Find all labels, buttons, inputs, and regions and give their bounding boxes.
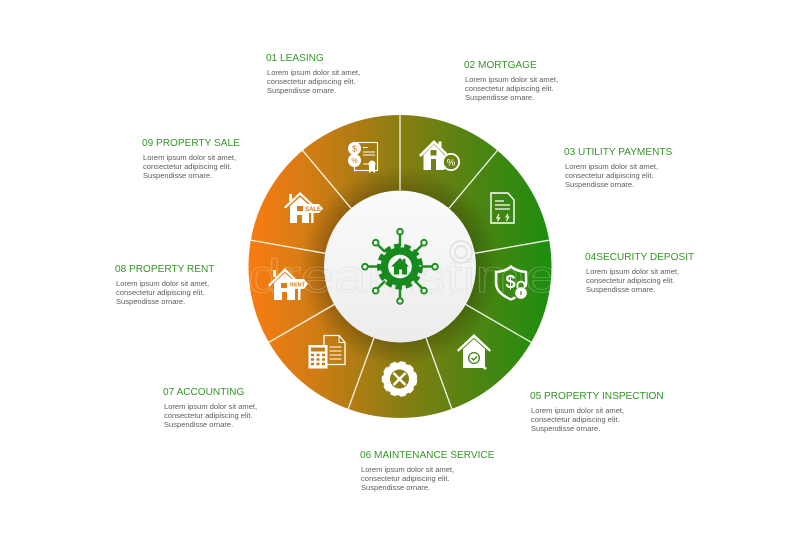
text block: 07 accounting: Suspendisse ornare. [164, 420, 233, 429]
icon: center gear with network nodes [362, 229, 438, 304]
icon: property sale house: SALE [305, 207, 321, 213]
text block: 01 leasing: Suspendisse ornare. [267, 86, 336, 95]
text block: 07 accounting: consectetur adipiscing elit. [164, 411, 253, 420]
text block: 05 property inspection [530, 391, 664, 433]
icon: leasing certificate [348, 142, 378, 173]
text block: 09 property sale: 09 PROPERTY SALE [142, 138, 240, 149]
text block: 06 maintenance service: Suspendisse ornare. [361, 483, 430, 492]
text block: 08 property rent: 08 PROPERTY RENT [115, 264, 214, 275]
text block: 05 property inspection: consectetur adipiscing elit. [531, 415, 620, 424]
icon: property sale house [284, 192, 323, 223]
wheel ring [248, 115, 552, 418]
text block: 08 property rent: consectetur adipiscing elit. [116, 288, 205, 297]
icon: leasing certificate: $ [352, 144, 357, 154]
text block: 03 utility payments: 03 UTILITY PAYMENTS [564, 147, 672, 158]
text block: 01 leasing: consectetur adipiscing elit. [267, 77, 356, 86]
icon: security deposit shield [496, 266, 528, 300]
text block: 06 maintenance service: Lorem ipsum dolor sit amet, [361, 464, 454, 474]
text block: 07 accounting: Lorem ipsum dolor sit amet, [164, 402, 257, 410]
icon: accounting calculator and paper [308, 336, 345, 368]
text block: 06 maintenance service [360, 450, 494, 492]
text block: 02 mortgage [464, 60, 558, 102]
icon: property inspection house [457, 334, 491, 369]
text block: 03 utility payments: Suspendisse ornare. [565, 180, 634, 189]
text block: 09 property sale: Suspendisse ornare. [143, 171, 212, 180]
text block: 07 accounting [163, 387, 257, 429]
icon: property rent house [268, 268, 308, 300]
text block: 04 security deposit [585, 252, 694, 294]
text block: 02 mortgage: Suspendisse ornare. [465, 93, 534, 102]
text block: 06 maintenance service: consectetur adipiscing elit. [361, 474, 450, 483]
watermark: dreamstime [248, 250, 558, 302]
text block: 02 mortgage: consectetur adipiscing elit. [465, 84, 554, 93]
icon: security deposit shield: $ [505, 272, 516, 292]
text block: 02 mortgage: 02 MORTGAGE [464, 60, 537, 71]
watermark: dreamstime [248, 250, 558, 302]
text block: 06 maintenance service: 06 MAINTENANCE SERVICE [360, 450, 494, 461]
text block: 02 mortgage: Lorem ipsum dolor sit amet, [465, 74, 558, 84]
icon: utility bill document [491, 193, 514, 223]
text block: 08 property rent: Suspendisse ornare. [116, 297, 185, 306]
chart: circular nine-segment wheel with icons [248, 115, 552, 418]
text block: 04 security deposit: consectetur adipiscing elit. [586, 276, 675, 285]
watermark [250, 240, 552, 293]
text block: 03 utility payments [564, 147, 672, 189]
center disc [324, 190, 476, 342]
text block: 09 property sale: consectetur adipiscing elit. [143, 162, 232, 171]
text block: 03 utility payments: Lorem ipsum dolor sit amet, [565, 162, 658, 170]
icon: property rent house: RENT [290, 282, 306, 288]
text block: 03 utility payments: consectetur adipiscing elit. [565, 171, 654, 180]
text block: 04 security deposit: Suspendisse ornare. [586, 285, 655, 294]
text block: 05 property inspection: Suspendisse ornare. [531, 424, 600, 433]
icon: leasing certificate: % [351, 158, 358, 165]
text block: 05 property inspection: 05 PROPERTY INSPECTION [530, 391, 664, 402]
text block: 04 security deposit: Lorem ipsum dolor sit amet, [586, 266, 679, 276]
text block: 04 security deposit: 04SECURITY DEPOSIT [585, 252, 694, 263]
text block: 01 leasing: 01 LEASING [266, 53, 324, 64]
text block: 08 property rent [115, 264, 214, 306]
text block: 01 leasing: Lorem ipsum dolor sit amet, [267, 68, 360, 76]
text block: 07 accounting: 07 ACCOUNTING [163, 387, 244, 398]
text block: 09 property sale [142, 138, 240, 180]
text block: 05 property inspection: Lorem ipsum dolor sit amet, [531, 406, 624, 414]
icon: maintenance gear [384, 363, 416, 395]
text block: 01 leasing [266, 53, 360, 95]
text block: 08 property rent: Lorem ipsum dolor sit amet, [116, 278, 209, 288]
text block: 09 property sale: Lorem ipsum dolor sit amet, [143, 152, 236, 162]
icon: mortgage house percent: % [447, 158, 456, 168]
icon: mortgage house percent [419, 140, 460, 171]
